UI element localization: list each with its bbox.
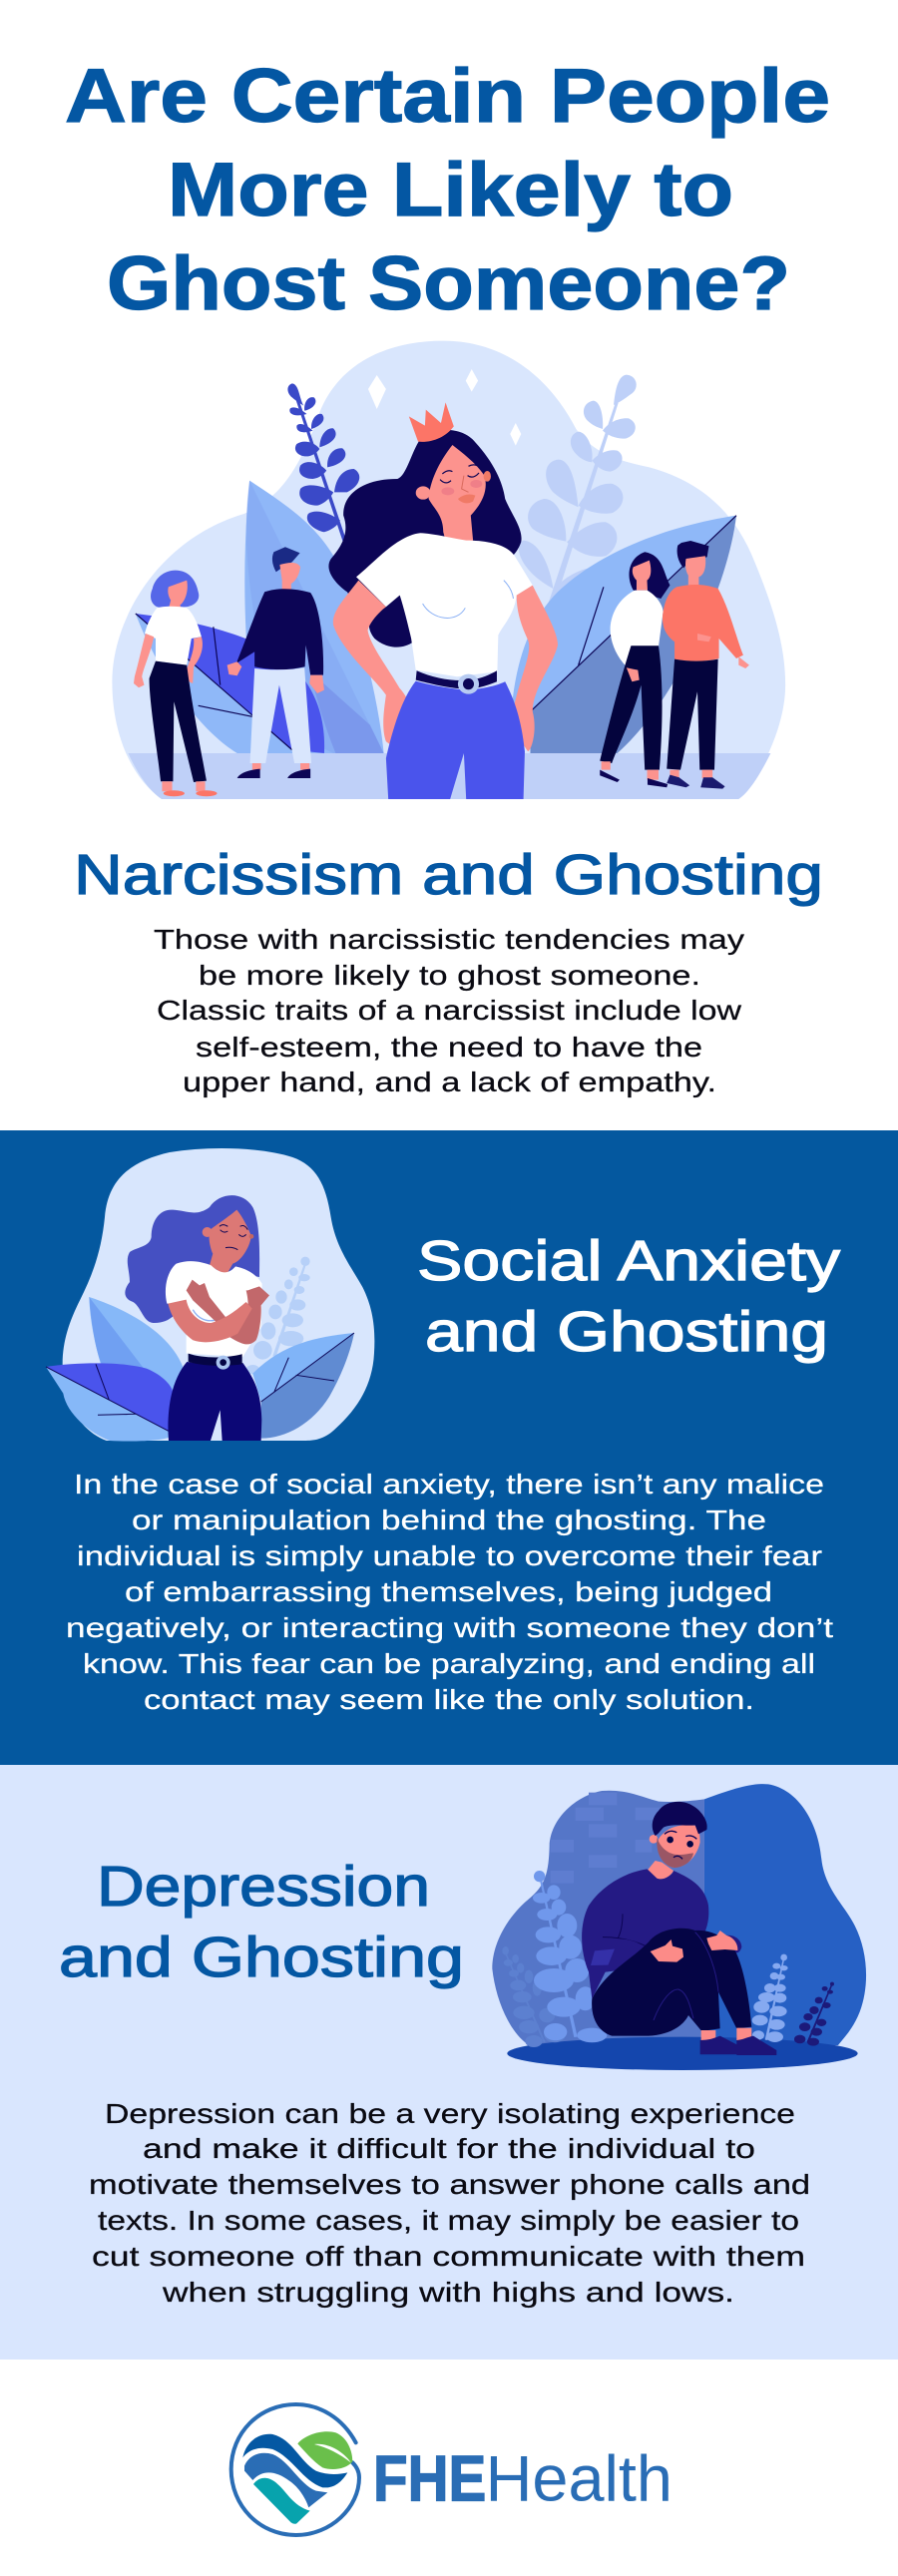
text: depression body [89, 2098, 810, 2308]
title: More Likely to [168, 148, 733, 232]
text: depression body: motivate themselves to answer phone calls and [89, 2169, 810, 2200]
heading: depression [59, 1855, 464, 1989]
right leaf [510, 516, 736, 753]
heading: social anxiety: and Ghosting [425, 1300, 828, 1364]
text: social anxiety body: contact may seem like the only solution. [144, 1684, 754, 1715]
text: social anxiety body: of embarrassing themselves, being judged [125, 1576, 772, 1607]
panel: depression [0, 1765, 898, 2360]
heading: depression: and Ghosting [59, 1926, 464, 1989]
logo: FHE Health [231, 2404, 673, 2535]
person: right couple [600, 541, 749, 789]
title [65, 54, 830, 326]
panel: social anxiety [0, 1130, 898, 1765]
text: depression body: when struggling with highs and lows. [162, 2277, 734, 2308]
icon: logo mark [231, 2404, 359, 2535]
text: depression body: texts. In some cases, it may simply be easier to [98, 2205, 799, 2236]
text: social anxiety body: negatively, or interacting with someone they don’t [66, 1612, 833, 1643]
left back leaf [244, 481, 384, 753]
text: narcissism body: be more likely to ghost someone. [199, 960, 700, 991]
heading: narcissism: Narcissism and Ghosting [74, 843, 823, 907]
logo wordmark: Health [486, 2442, 673, 2515]
text: narcissism body: Those with narcissistic tendencies may [154, 924, 744, 955]
logo wordmark [373, 2442, 673, 2515]
text: depression body: Depression can be a very isolating experience [105, 2098, 795, 2129]
heading: depression: Depression [97, 1855, 430, 1919]
logo wordmark: FHE [373, 2442, 486, 2515]
person: man in navy sweater [227, 547, 324, 778]
text: social anxiety body: In the case of social anxiety, there isn’t any malice [74, 1469, 824, 1500]
text: social anxiety body [66, 1469, 833, 1715]
title: Are Certain People [65, 54, 830, 139]
heading: social anxiety: Social Anxiety [417, 1229, 841, 1293]
title: Ghost Someone? [107, 241, 790, 326]
text: narcissism body: upper hand, and a lack of empathy. [183, 1067, 716, 1097]
text: depression body: cut someone off than communicate with them [92, 2241, 805, 2272]
text: narcissism body: Classic traits of a narcissist include low [157, 995, 742, 1026]
text: social anxiety body: or manipulation behind the ghosting. The [132, 1504, 766, 1535]
illustration: anxious woman hugging herself [46, 1148, 374, 1442]
person: left woman [134, 571, 218, 796]
text: narcissism body [154, 924, 744, 1097]
text: depression body: and make it difficult for the individual to [143, 2133, 755, 2164]
left front leaf [136, 614, 324, 753]
illustration: depressed man sitting against wall [492, 1784, 866, 2070]
text: social anxiety body: individual is simply unable to overcome their fear [77, 1540, 822, 1571]
person: central woman with crown [328, 402, 558, 799]
illustration: narcissist woman with crown and onlookers [112, 341, 785, 799]
text: narcissism body: self-esteem, the need to have the [196, 1032, 702, 1063]
heading: social anxiety [417, 1229, 841, 1364]
text: social anxiety body: know. This fear can be paralyzing, and ending all [83, 1648, 815, 1679]
